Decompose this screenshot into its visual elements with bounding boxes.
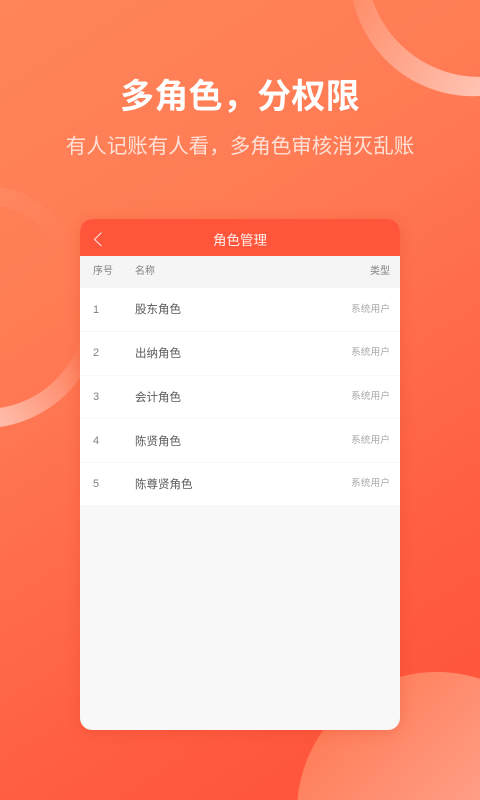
row 3: 会计角色	[135, 392, 181, 404]
row 4	[80, 419, 400, 463]
bottom-right circle	[298, 672, 480, 800]
header title: 角色管理	[213, 233, 267, 248]
panel: phone card	[80, 219, 400, 730]
row 1	[80, 288, 400, 332]
row 4: 4	[93, 435, 99, 447]
row 2	[80, 332, 400, 376]
top-right ring	[353, 0, 480, 96]
table header: 序号	[93, 266, 113, 277]
row 3: 3	[93, 391, 99, 403]
row 5	[93, 478, 390, 491]
row 5: 系统用户	[351, 478, 390, 489]
table header	[80, 256, 400, 288]
card header	[80, 219, 400, 256]
left ring upper	[0, 187, 74, 250]
table header: 名称	[135, 266, 155, 277]
row 2: 2	[93, 347, 99, 359]
row 1: 1	[93, 304, 99, 316]
row 5: 5	[93, 478, 99, 490]
left ring lower	[0, 341, 80, 427]
subtitle: 有人记账有人看，多角色审核消灭乱账	[66, 135, 414, 158]
row 2: 系统用户	[351, 347, 390, 358]
table rows	[80, 288, 400, 505]
title: 多角色，分权限	[120, 78, 360, 116]
row 3: 系统用户	[351, 391, 390, 402]
icon: back arrow	[94, 232, 102, 246]
row 3	[80, 375, 400, 419]
row 4: 陈贤角色	[135, 436, 181, 448]
row 1: 系统用户	[351, 304, 390, 315]
row 1: 股东角色	[135, 304, 181, 316]
table header: 类型	[370, 266, 390, 277]
row 2: 出纳角色	[135, 348, 181, 360]
row 4: 系统用户	[351, 435, 390, 446]
row 5: 陈尊贤角色	[135, 479, 192, 491]
